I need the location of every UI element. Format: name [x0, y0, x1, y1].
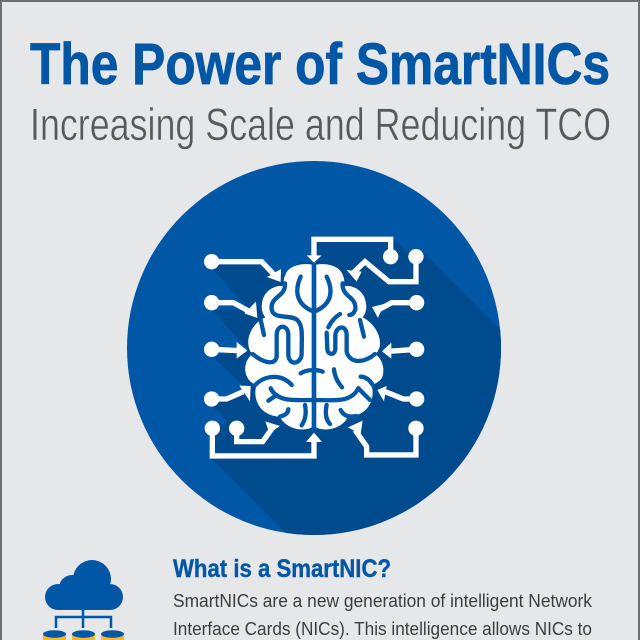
icon: cloud network [43, 560, 124, 640]
brain lobes [245, 264, 383, 430]
circuit wires [212, 239, 417, 456]
brain grooves [253, 262, 375, 432]
arrowheads [267, 269, 281, 282]
cloud [45, 560, 123, 610]
long shadow [209, 238, 501, 535]
blue circle with brain circuit icon [127, 161, 501, 535]
section heading: What is a SmartNIC? [173, 555, 391, 583]
connector nodes [204, 249, 424, 442]
network lines [56, 610, 111, 628]
body text: SmartNICs are a new generation of intelligent Network [173, 590, 593, 611]
body text: Interface Cards (NICs). This intelligence allows NICs to [173, 618, 592, 639]
database disks [43, 634, 66, 640]
icon: brain with circuit connectors [204, 239, 424, 456]
